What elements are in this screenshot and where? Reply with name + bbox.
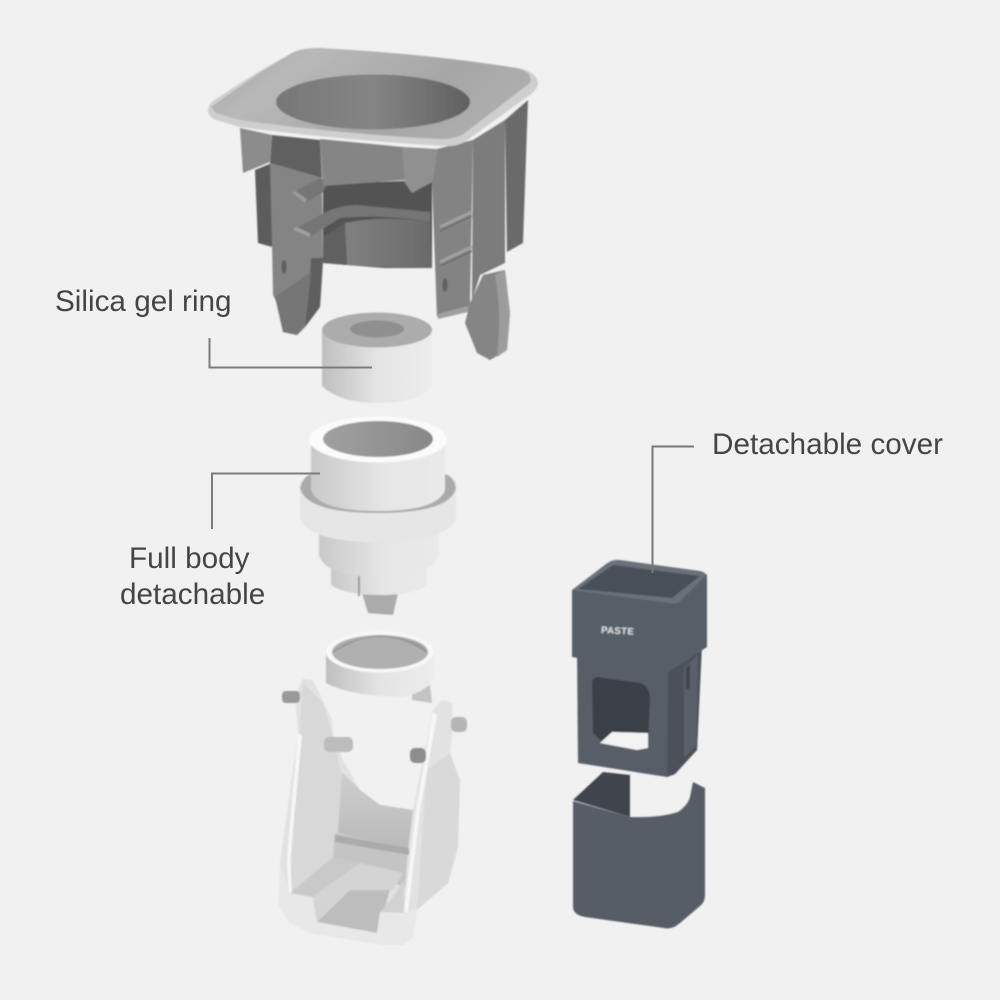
left dark back xyxy=(255,163,272,247)
pins xyxy=(282,691,300,703)
label: detachable cover xyxy=(652,428,943,573)
right rim highlight xyxy=(404,712,437,912)
cap inside xyxy=(578,565,700,598)
floor xyxy=(290,857,360,897)
cap rim xyxy=(572,560,706,604)
outer right side xyxy=(417,753,460,910)
center back panels xyxy=(270,135,322,178)
label: detachable cover: Detachable cover xyxy=(712,428,943,461)
label: full body detachable xyxy=(120,474,320,611)
left leg xyxy=(270,163,323,335)
ramp xyxy=(313,863,403,922)
main sleeve xyxy=(311,439,445,511)
channel floor xyxy=(317,890,390,933)
label: silica gel ring xyxy=(55,285,372,368)
part: small locking ring xyxy=(326,632,434,703)
cap outer xyxy=(572,574,707,673)
interior back xyxy=(323,180,432,268)
PASTE print: PASTE xyxy=(601,625,634,638)
right block xyxy=(380,880,404,913)
part: detachable cover lower xyxy=(573,772,705,928)
part: detachable cover upper xyxy=(572,560,707,777)
right column xyxy=(505,100,528,252)
left inner wall xyxy=(290,683,342,893)
label: full body detachable: detachable xyxy=(120,578,265,611)
flange hole xyxy=(276,74,470,130)
lower tiers xyxy=(331,565,427,595)
upper shelf ledge xyxy=(292,178,328,203)
tip xyxy=(362,593,398,615)
back wall xyxy=(338,772,413,850)
overall silhouette xyxy=(279,679,460,945)
left rim highlight xyxy=(287,733,302,893)
part: silica gel ring xyxy=(322,312,432,403)
label: silica gel ring: Silica gel ring xyxy=(55,285,232,318)
top flange edge xyxy=(208,49,538,146)
lower body xyxy=(577,640,702,777)
lower back wall xyxy=(333,833,408,887)
label: full body detachable: Full body xyxy=(129,542,250,575)
front frame lip xyxy=(279,863,417,945)
flange top face xyxy=(211,48,531,139)
part: top dispenser housing xyxy=(208,48,538,360)
dispensing window xyxy=(592,677,650,750)
right leg xyxy=(465,270,510,360)
part: lower bracket xyxy=(279,679,467,945)
lower shelf band xyxy=(293,205,430,237)
part: full body detachable core xyxy=(300,416,456,615)
